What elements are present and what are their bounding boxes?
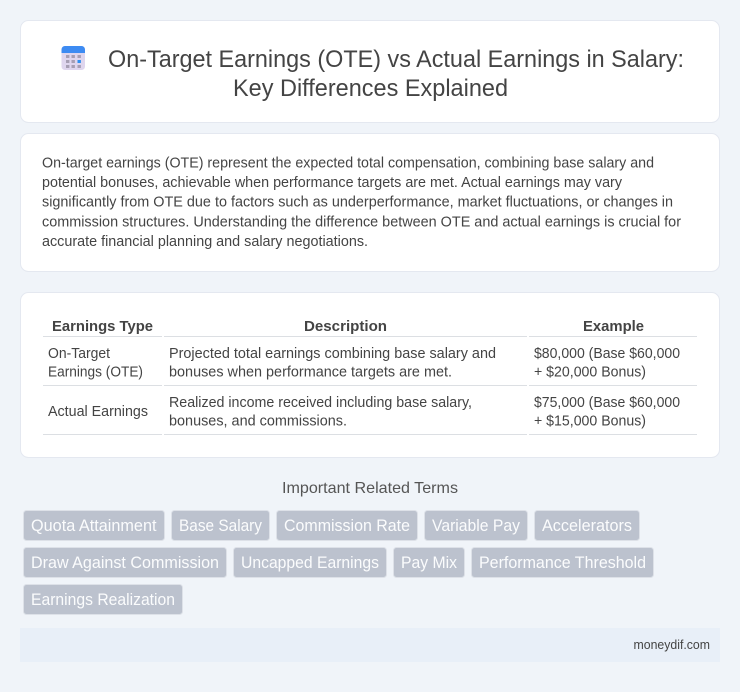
table row: actual earnings: Actual Earnings [48,404,148,420]
tag: uncapped earnings: Uncapped Earnings [241,554,379,572]
tag: performance threshold [472,548,654,578]
panel: comparison table [20,292,720,458]
tag: earnings realization: Earnings Realization [31,591,175,609]
table row: on-target earnings: bonuses when performance targets are met. [169,364,452,380]
table header: Earnings Type [52,319,153,335]
tag: base salary [172,510,270,540]
panel: title card [20,20,720,122]
tag: variable pay: Variable Pay [432,517,521,535]
tag: variable pay [424,510,528,540]
icon: calendar [62,46,85,70]
tag: accelerators: Accelerators [542,517,632,535]
tag: accelerators [534,510,640,540]
panel: summary paragraph: significantly from OTE due to factors such as underperformance, market fluctuations, or changes in [42,195,673,211]
tag: quota attainment: Quota Attainment [31,517,157,535]
panel: summary paragraph: accurate financial planning and salary negotiations. [42,234,368,250]
table row: on-target earnings [43,346,697,386]
table row: on-target earnings: + $20,000 Bonus) [534,364,646,380]
tag: pay mix [394,548,464,578]
footer [20,628,720,662]
table header: Example [583,319,644,335]
tag: draw against commission [24,548,226,578]
title: Key Differences Explained [233,75,508,102]
footer: moneydif.com [634,637,710,652]
panel: summary paragraph: potential bonuses, achievable when performance targets are met. Actual earnings may vary [42,175,623,191]
table row: actual earnings: Realized income received including base salary, [169,395,472,411]
tag: earnings realization [24,584,182,614]
panel: summary paragraph: On-target earnings (OTE) represent the expected total compensation, combining base salary and [42,156,654,172]
tag: pay mix: Pay Mix [401,554,458,572]
tag list: related terms [24,510,654,614]
table row: on-target earnings: Earnings (OTE) [48,364,143,380]
panel: summary paragraph: commission structures. Understanding the difference between OTE and actual earnings is crucial for [42,214,681,230]
table row: on-target earnings: Projected total earnings combining base salary and [169,346,496,362]
table row: actual earnings [43,395,697,435]
tag: commission rate [276,510,418,540]
tag: base salary: Base Salary [179,517,263,535]
table header: Description [304,319,387,335]
panel: summary paragraph [20,134,720,272]
tag: commission rate: Commission Rate [284,517,410,535]
table row: on-target earnings: $80,000 (Base $60,000 [534,346,680,362]
tag: draw against commission: Draw Against Commission [31,554,219,572]
heading: important related terms: Important Related Terms [282,480,458,497]
table row: on-target earnings: On-Target [48,346,110,362]
title [108,46,684,102]
title: On-Target Earnings (OTE) vs Actual Earnings in Salary: [108,46,684,73]
tag: quota attainment [24,510,164,540]
table row: actual earnings: $75,000 (Base $60,000 [534,395,680,411]
tag: performance threshold: Performance Threshold [479,554,646,572]
table row: actual earnings: + $15,000 Bonus) [534,414,646,430]
table header [43,319,697,337]
tag: uncapped earnings [234,548,386,578]
table row: actual earnings: bonuses, and commissions. [169,414,347,430]
